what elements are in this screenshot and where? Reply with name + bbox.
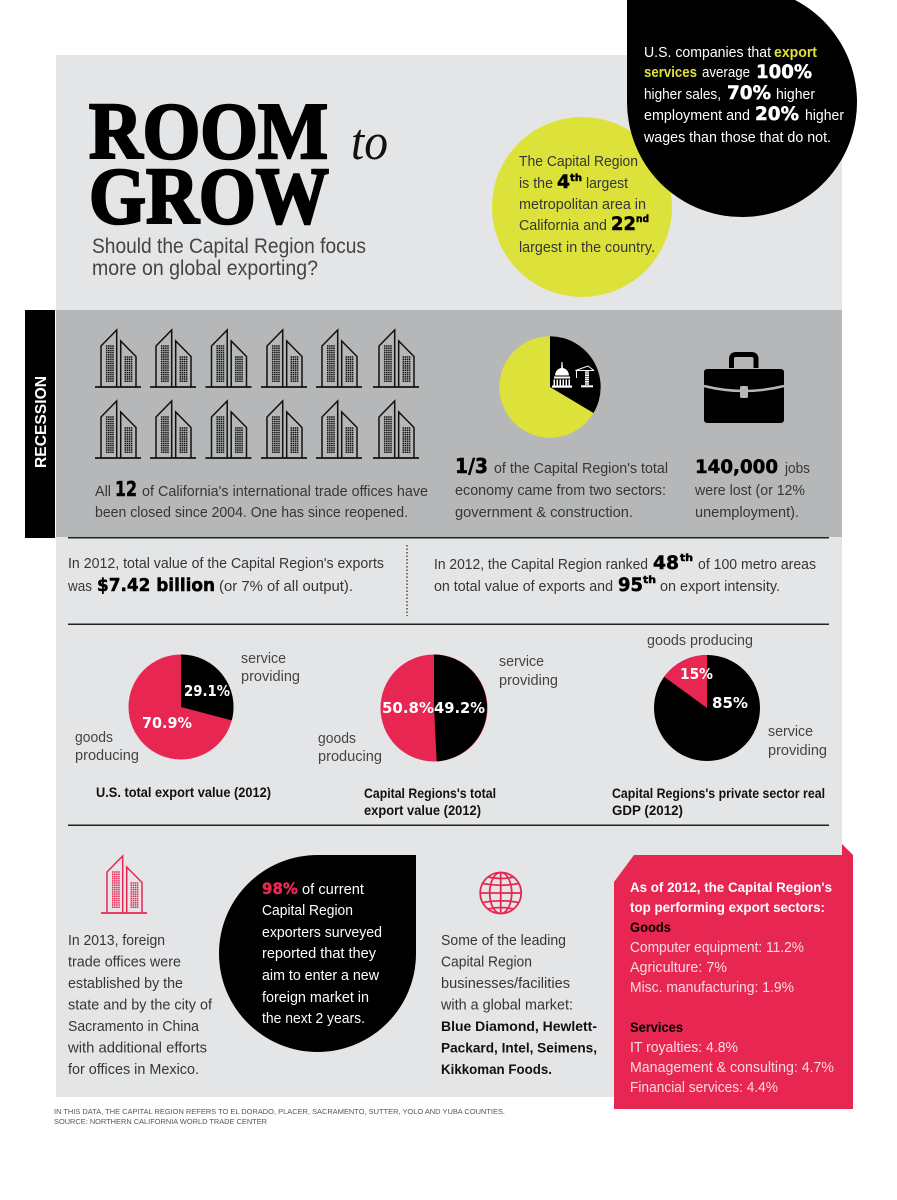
rule above pies: [68, 624, 829, 625]
callout: yellow circle: [492, 117, 672, 297]
pie chart: Capital Region private sector GDP: 85%: [712, 694, 748, 712]
text: metro ranking: In 2012, the Capital Region ranked: [434, 557, 648, 573]
pie chart: Capital Region private sector GDP: [612, 633, 827, 818]
icon: red office building: [101, 856, 147, 913]
text: total value of exports: $7.42 billion: [97, 575, 215, 596]
pie chart: U.S. total export value: goods: [75, 730, 113, 746]
text: jobs lost: 140,000: [695, 456, 778, 478]
pie chart: U.S. total export value: providing: [241, 669, 300, 685]
callout: black teardrop 98 percent: foreign market in: [262, 990, 369, 1006]
callout: yellow circle: largest in the country.: [519, 240, 655, 256]
text: metro ranking: 95: [618, 574, 643, 596]
callout: black teardrop 98 percent: Capital Region: [262, 903, 353, 919]
pie: one third of economy: [499, 336, 601, 438]
text: one third of economy: government & construction.: [455, 505, 633, 521]
text: foreign trade offices: for offices in Mexico.: [68, 1062, 199, 1078]
panel: top performing export sectors: top performing export sectors:: [630, 899, 825, 915]
callout: black teardrop with export services: higher sales,: [644, 87, 721, 103]
icon: capitol building: [552, 362, 572, 388]
icon: briefcase: [704, 354, 784, 423]
dotted divider: [406, 545, 408, 616]
text: metro ranking: 48: [653, 552, 679, 574]
title: to: [351, 114, 388, 171]
panel: light grey background: [56, 55, 842, 1097]
pie chart: Capital Region total export value: Capital Regions's total: [364, 785, 496, 801]
panel: top performing export sectors: Misc. manufacturing: 1.9%: [630, 980, 794, 996]
footnote and source: IN THIS DATA, THE CAPITAL REGION REFERS TO EL DORADO, PLACER, SACRAMENTO, SUTTER, YOLO AND YUBA COUNTIES.: [54, 1107, 505, 1116]
text: metro ranking: [434, 552, 816, 596]
text: jobs lost: were lost (or 12%: [694, 483, 805, 499]
text: total value of exports: was: [67, 579, 92, 595]
pie chart: Capital Region private sector GDP: goods producing: [647, 633, 753, 649]
panel: top performing export sectors: Agriculture: 7%: [630, 960, 727, 976]
rule below pies: [68, 824, 829, 826]
panel: top performing export sectors: Services: [630, 1019, 683, 1035]
pie chart: Capital Region private sector GDP: Capital Regions's private sector real: [612, 785, 825, 801]
pie chart: Capital Region private sector GDP: GDP (2012): [612, 802, 683, 818]
icon: construction crane: [576, 366, 594, 386]
callout: yellow circle: 4: [557, 171, 570, 193]
text: leading businesses: Packard, Intel, Seimens,: [441, 1040, 597, 1056]
callout: black teardrop 98 percent: reported that they: [262, 946, 377, 962]
text: total value of exports: In 2012, total value of the Capital Region's exports: [68, 556, 384, 572]
callout: black teardrop 98 percent: exporters surveyed: [262, 925, 382, 941]
text: leading businesses: Blue Diamond, Hewlett-: [441, 1018, 597, 1034]
pie chart: U.S. total export value: service: [241, 651, 286, 667]
pie chart: Capital Region total export value: service: [499, 654, 544, 670]
text: foreign trade offices: Sacramento in China: [68, 1019, 200, 1035]
text: one third of economy: economy came from two sectors:: [455, 483, 666, 499]
text: one third of economy: 1/3: [455, 454, 488, 478]
panel: recession band: [56, 310, 842, 537]
callout: yellow circle: largest: [586, 176, 628, 192]
callout: black teardrop with export services: employment and: [644, 108, 750, 124]
pie chart: Capital Region private sector GDP: 15%: [680, 665, 713, 683]
text: trade offices closed: [95, 477, 428, 521]
text: leading businesses: Some of the leading: [441, 933, 566, 949]
text: trade offices closed: of California's international trade offices have: [142, 484, 428, 500]
recession side tab: RECESSION: [33, 376, 50, 468]
text: metro ranking: of 100 metro areas: [698, 557, 816, 573]
panel: top performing export sectors: Management & consulting: 4.7%: [630, 1060, 834, 1076]
callout: black teardrop with export services: [627, 0, 857, 217]
text: foreign trade offices: In 2013, foreign: [68, 933, 165, 949]
callout: yellow circle: nd: [636, 214, 649, 225]
callout: yellow circle: California and: [519, 218, 607, 234]
text: foreign trade offices: established by the: [68, 976, 183, 992]
pie chart: Capital Region total export value: export value (2012): [364, 802, 481, 818]
pie chart: Capital Region private sector GDP: service: [768, 724, 813, 740]
callout: yellow circle: is the: [519, 176, 553, 192]
callout: black teardrop 98 percent: [219, 855, 416, 1052]
text: total value of exports: [67, 556, 384, 596]
panel: top performing export sectors: Computer equipment: 11.2%: [630, 940, 804, 956]
text: one third of economy: of the Capital Region's total: [494, 461, 668, 477]
panel: top performing export sectors: [614, 844, 853, 1109]
callout: black teardrop 98 percent: 98%: [262, 879, 298, 898]
callout: yellow circle: th: [570, 173, 582, 184]
text: jobs lost: [694, 456, 810, 521]
recession side tab: [25, 310, 55, 538]
pie chart: U.S. total export value: producing: [75, 748, 139, 764]
text: jobs lost: unemployment).: [695, 505, 799, 521]
text: one third of economy: [455, 454, 668, 521]
callout: black teardrop with export services: higher: [776, 87, 815, 103]
callout: black teardrop with export services: average: [702, 65, 750, 81]
pie chart: Capital Region total export value: producing: [318, 749, 382, 765]
text: foreign trade offices: [67, 933, 213, 1078]
text: foreign trade offices: state and by the city of: [68, 998, 213, 1014]
text: foreign trade offices: with additional efforts: [67, 1040, 207, 1056]
pie chart: Capital Region total export value: goods: [318, 731, 356, 747]
text: metro ranking: th: [643, 575, 656, 586]
panel: top performing export sectors: Goods: [630, 919, 671, 935]
text: metro ranking: th: [680, 553, 693, 564]
text: leading businesses: Kikkoman Foods.: [441, 1061, 552, 1077]
subtitle: more on global exporting?: [92, 257, 318, 280]
pie chart: Capital Region total export value: 49.2%: [434, 699, 485, 717]
pie chart: U.S. total export value: U.S. total export value (2012): [96, 784, 271, 800]
subtitle: Should the Capital Region focus: [92, 235, 366, 258]
title: ROOM: [89, 86, 328, 176]
title: GROW: [89, 151, 329, 241]
pie chart: Capital Region total export value: [318, 654, 558, 818]
icons: 12 closed trade offices: [95, 330, 419, 458]
text: leading businesses: [440, 933, 597, 1077]
callout: black teardrop with export services: export: [774, 45, 817, 61]
pie chart: U.S. total export value: [75, 651, 300, 800]
text: metro ranking: on export intensity.: [660, 579, 780, 595]
callout: yellow circle: The Capital Region: [519, 154, 638, 170]
text: total value of exports: (or 7% of all output).: [219, 579, 353, 595]
pie chart: U.S. total export value: 70.9%: [142, 714, 192, 732]
callout: black teardrop with export services: services: [644, 65, 697, 81]
callout: black teardrop 98 percent: aim to enter a new: [262, 968, 380, 984]
text: trade offices closed: been closed since 2004. One has since reopened.: [95, 505, 408, 521]
text: trade offices closed: 12: [115, 477, 137, 501]
panel: top performing export sectors: Financial services: 4.4%: [630, 1080, 778, 1096]
icon: globe: [480, 872, 521, 914]
text: leading businesses: Capital Region: [441, 954, 532, 970]
text: trade offices closed: All: [95, 484, 111, 500]
callout: black teardrop 98 percent: of current: [302, 882, 364, 898]
callout: black teardrop with export services: 70%: [727, 82, 771, 104]
footnote and source: SOURCE: NORTHERN CALIFORNIA WORLD TRADE CENTER: [54, 1117, 268, 1126]
pie chart: Capital Region total export value: 50.8%: [382, 699, 434, 717]
text: leading businesses: businesses/facilities: [441, 976, 570, 992]
pie chart: Capital Region total export value: providing: [499, 673, 558, 689]
callout: black teardrop 98 percent: the next 2 years.: [262, 1011, 365, 1027]
text: leading businesses: with a global market:: [440, 998, 573, 1014]
text: foreign trade offices: trade offices were: [68, 954, 181, 970]
pie chart: Capital Region private sector GDP: providing: [768, 743, 827, 759]
panel: top performing export sectors: As of 2012, the Capital Region's: [630, 879, 832, 895]
text: metro ranking: on total value of exports and: [434, 579, 613, 595]
panel: top performing export sectors: IT royalties: 4.8%: [630, 1040, 738, 1056]
callout: yellow circle: 22: [611, 213, 636, 235]
callout: black teardrop with export services: U.S. companies that: [644, 45, 771, 61]
subtitle: [92, 235, 366, 280]
callout: black teardrop with export services: wages than those that do not.: [643, 130, 831, 146]
rule under recession band: [68, 537, 829, 538]
callout: yellow circle: metropolitan area in: [519, 197, 646, 213]
callout: black teardrop with export services: 20%: [755, 103, 799, 125]
footnote and source: [54, 1107, 505, 1126]
text: jobs lost: jobs: [784, 461, 810, 477]
callout: black teardrop with export services: higher: [805, 108, 844, 124]
pie chart: U.S. total export value: 29.1%: [184, 682, 230, 700]
callout: black teardrop with export services: 100%: [756, 61, 812, 83]
title: [89, 86, 388, 241]
